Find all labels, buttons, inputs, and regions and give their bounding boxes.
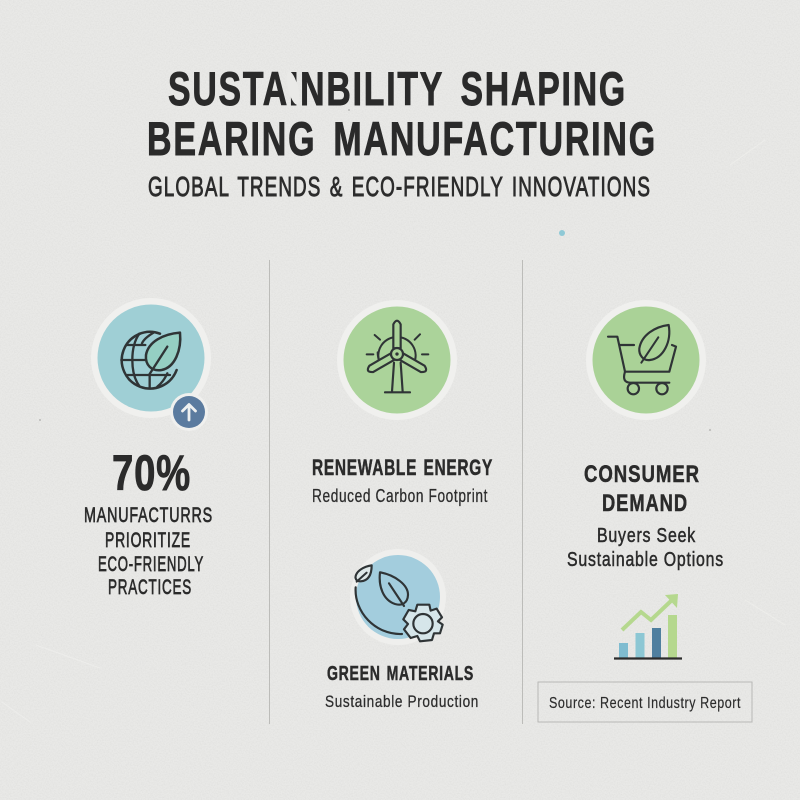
text: manufacturers prioritize eco-friendly practices — [84, 504, 213, 599]
source box — [538, 682, 752, 722]
title — [147, 62, 657, 165]
icon: leaves and gear — [350, 549, 446, 645]
heading: consumer demand — [584, 461, 700, 517]
panel: consumer demand — [538, 300, 752, 722]
text: buyers seek sustainable options: Buyers Seek — [597, 525, 696, 547]
text: sustainable production: Sustainable Production — [325, 692, 479, 711]
panel: green materials — [325, 549, 479, 711]
icon: wind turbine — [337, 300, 457, 420]
heading: green materials: GREEN MATERIALS — [327, 663, 474, 685]
panel: manufacturers statistic — [84, 298, 213, 599]
panel: renewable energy — [312, 300, 493, 506]
chart: rising bars with arrow — [614, 594, 682, 658]
text: buyers seek sustainable options: Sustainable Options — [567, 549, 724, 571]
column dividers — [270, 260, 522, 724]
text: manufacturers prioritize eco-friendly practices: MANUFACTURRS — [84, 504, 213, 527]
icon: globe and leaf with up arrow badge — [91, 298, 211, 431]
statistic: 70%: 70% — [112, 445, 191, 501]
text: manufacturers prioritize eco-friendly practices: PRIORITIZE — [105, 529, 191, 552]
heading: consumer demand: DEMAND — [602, 490, 688, 517]
heading: renewable energy: RENEWABLE ENERGY — [312, 455, 493, 480]
text: buyers seek sustainable options — [567, 525, 724, 571]
heading: consumer demand: CONSUMER — [584, 461, 700, 488]
title: SUSTAINBILITY SHAPING — [168, 62, 627, 115]
source box: Source: Recent Industry Report — [549, 695, 741, 712]
text: reduced carbon footprint: Reduced Carbon Footprint — [312, 486, 488, 506]
text: manufacturers prioritize eco-friendly practices: ECO-FRIENDLY — [98, 553, 204, 576]
text: manufacturers prioritize eco-friendly practices: PRACTICES — [108, 576, 192, 599]
teal speck — [559, 230, 565, 236]
icon: shopping cart with leaf — [586, 300, 706, 420]
